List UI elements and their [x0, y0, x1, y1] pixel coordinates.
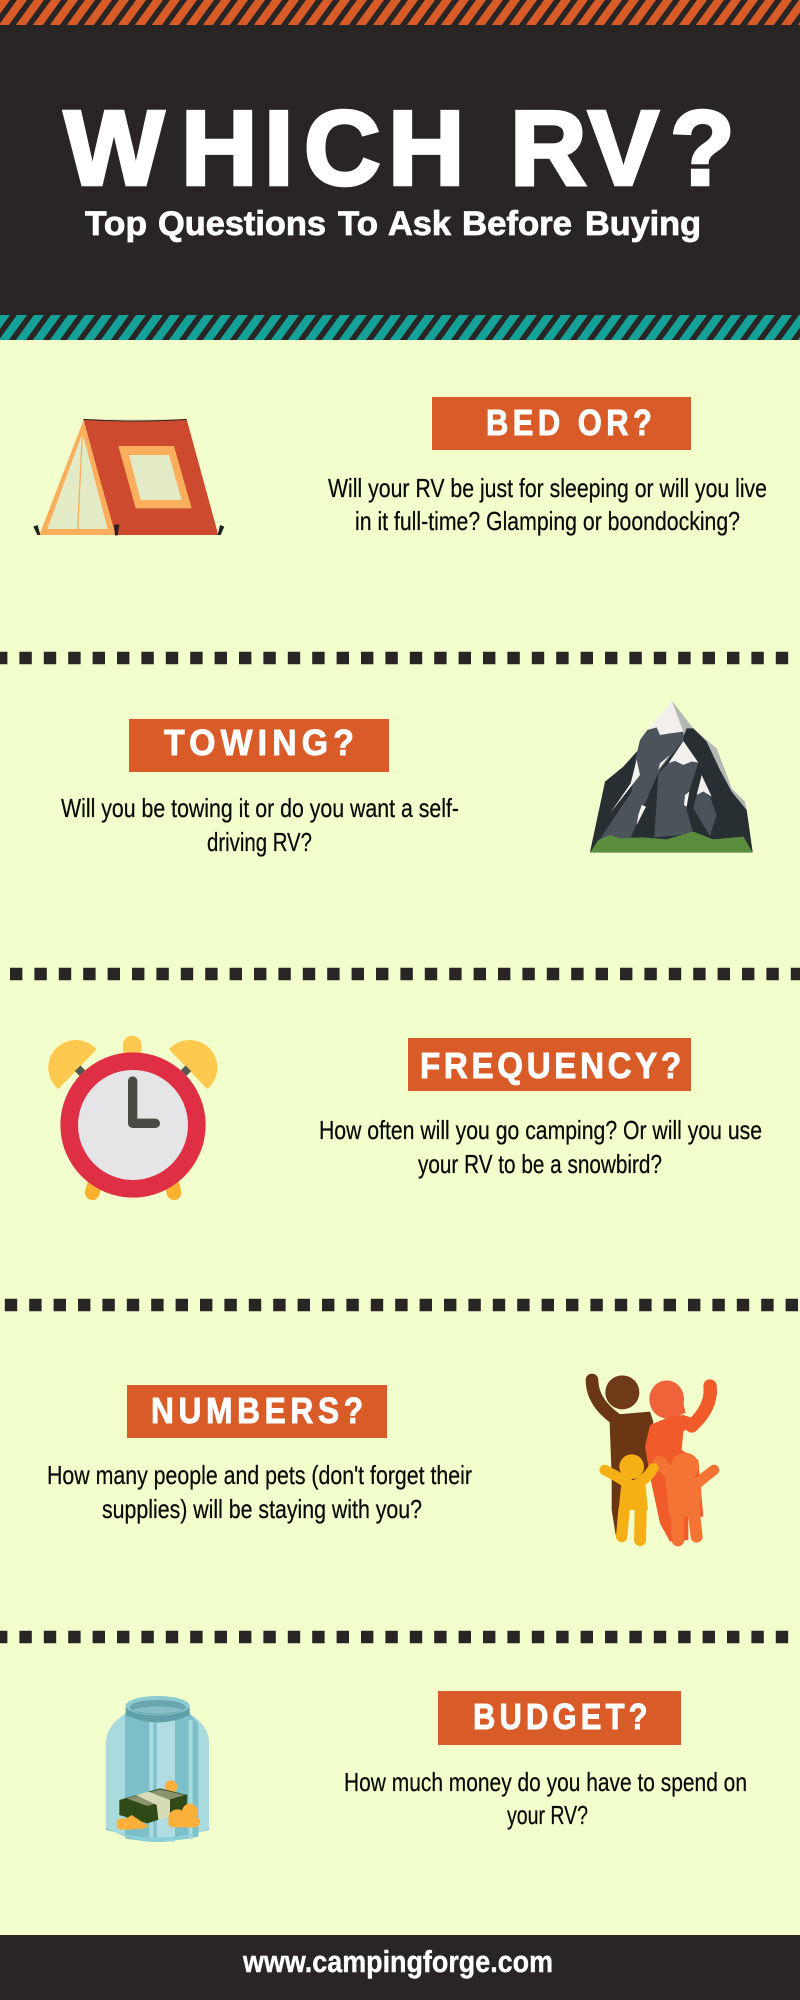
text block: towing: Will you be towing it or do you want a self- [61, 793, 459, 823]
heading: numbers: NUMBERS? [151, 1391, 363, 1431]
section: towing [61, 701, 753, 857]
heading: towing [129, 719, 389, 772]
teal striped border [0, 315, 800, 340]
text block: budget: your RV? [507, 1800, 588, 1830]
heading: frequency [408, 1038, 691, 1091]
dotted divider 1 [0, 652, 800, 664]
heading: budget [438, 1691, 681, 1745]
text block: frequency [319, 1115, 762, 1179]
text block: bed or [328, 473, 767, 536]
dotted divider 2 [10, 968, 800, 980]
icon: mountain [590, 701, 753, 853]
footer [0, 1935, 800, 2000]
orange child [659, 1453, 714, 1540]
text block: frequency: your RV to be a snowbird? [418, 1149, 662, 1179]
dotted divider 4 [0, 1631, 800, 1643]
heading: towing: TOWING? [164, 723, 354, 763]
subtitle: Top [85, 205, 147, 243]
heading: frequency: FREQUENCY? [420, 1047, 681, 1086]
subtitle [85, 205, 701, 243]
heading: bed or: BED OR? [486, 404, 652, 444]
icon: money jar [106, 1696, 209, 1842]
mother figure [645, 1380, 710, 1542]
orange striped border [0, 0, 800, 25]
section: budget [106, 1691, 747, 1842]
heading: bed or [432, 397, 691, 450]
text block: towing: driving RV? [207, 827, 312, 857]
section: bed or [33, 397, 767, 536]
section: frequency [48, 1036, 762, 1198]
title: WHICHRV? [64, 90, 735, 208]
header band [0, 0, 800, 340]
subtitle: Questions [158, 205, 326, 243]
text block: numbers: supplies) will be staying with you? [102, 1494, 422, 1524]
section: numbers [47, 1375, 714, 1542]
heading: numbers [127, 1385, 387, 1438]
icon: family [592, 1375, 714, 1542]
dotted divider 3 [5, 1299, 800, 1311]
text block: numbers: How many people and pets (don't forget their [47, 1460, 472, 1490]
father figure [592, 1375, 653, 1535]
text block: towing [61, 793, 459, 857]
icon: tent [33, 419, 224, 535]
heading: budget: BUDGET? [473, 1698, 648, 1738]
subtitle: Before [462, 205, 572, 243]
subtitle: To [338, 205, 378, 243]
yellow child [605, 1454, 653, 1540]
icon: alarm clock [48, 1036, 217, 1198]
text block: budget [344, 1767, 747, 1830]
subtitle: Buying [585, 205, 701, 243]
text block: numbers [47, 1460, 472, 1524]
footer url: www.campingforge.com [242, 1944, 553, 1979]
subtitle: Ask [388, 205, 451, 243]
